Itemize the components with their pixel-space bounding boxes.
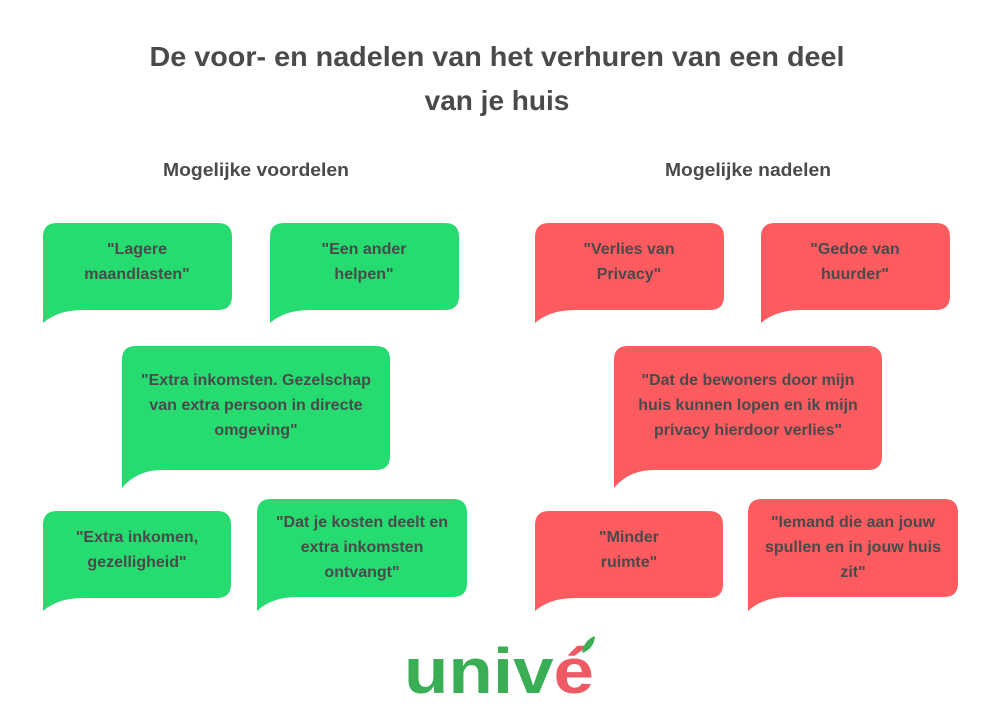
bubble: Minder ruimte: ruimte" [601, 554, 657, 571]
bubble: Gedoe van huurder: huurder" [821, 266, 889, 283]
logo: univé: univ é [404, 635, 594, 707]
bubble: kosten delen: "Dat je kosten deelt en [276, 514, 448, 531]
bubble: Een ander helpen [270, 223, 459, 323]
bubble: Extra inkomen [43, 511, 231, 611]
bubble: Een ander helpen: "Een ander [322, 241, 406, 258]
bubble: Iemand die aan jouw spullen: spullen en in jouw huis [765, 539, 941, 556]
title: De voor- en nadelen van het verhuren van een deel [150, 41, 844, 72]
bubble: Lagere maandlasten: "Lagere [107, 241, 167, 258]
bubble: bewoners door huis: "Dat de bewoners door mijn [642, 372, 854, 389]
bubble: Extra inkomen: "Extra inkomen, [76, 529, 198, 546]
bubble: Iemand die aan jouw spullen: "Iemand die aan jouw [771, 514, 936, 531]
bubble: bewoners door huis: privacy hierdoor verlies" [654, 422, 842, 439]
bubble: kosten delen: extra inkomsten [301, 539, 423, 556]
bubble: Lagere maandlasten: maandlasten" [84, 266, 190, 283]
bubble: Extra inkomsten: "Extra inkomsten. Gezelschap [141, 372, 371, 389]
heading: nadelen: Mogelijke nadelen [665, 160, 831, 180]
bubble: Verlies van Privacy: Privacy" [597, 266, 661, 283]
bubble: Extra inkomsten: omgeving" [214, 422, 298, 439]
bubble: Verlies van Privacy [535, 223, 724, 323]
bubble: Iemand die aan jouw spullen [748, 499, 958, 611]
bubble: Extra inkomen: gezelligheid" [87, 554, 187, 571]
bubble: kosten delen: ontvangt" [324, 564, 400, 581]
heading: voordelen: Mogelijke voordelen [163, 160, 349, 180]
bubble: Extra inkomsten [122, 346, 390, 488]
bubble: Verlies van Privacy: "Verlies van [583, 241, 675, 258]
bubble: bewoners door huis [614, 346, 882, 488]
bubble: Lagere maandlasten [43, 223, 232, 323]
title: van je huis [425, 85, 569, 116]
bubble: Extra inkomsten: van extra persoon in directe [149, 397, 363, 414]
bubble: Minder ruimte: "Minder [599, 529, 659, 546]
bubble: bewoners door huis: huis kunnen lopen en ik mijn [638, 397, 858, 414]
bubble: Gedoe van huurder: "Gedoe van [810, 241, 900, 258]
bubble: Gedoe van huurder [761, 223, 950, 323]
bubble: Iemand die aan jouw spullen: zit" [840, 564, 866, 581]
bubble: Minder ruimte [535, 511, 723, 611]
bubble: kosten delen [257, 499, 467, 611]
bubble: Een ander helpen: helpen" [334, 266, 394, 283]
title [150, 41, 844, 116]
